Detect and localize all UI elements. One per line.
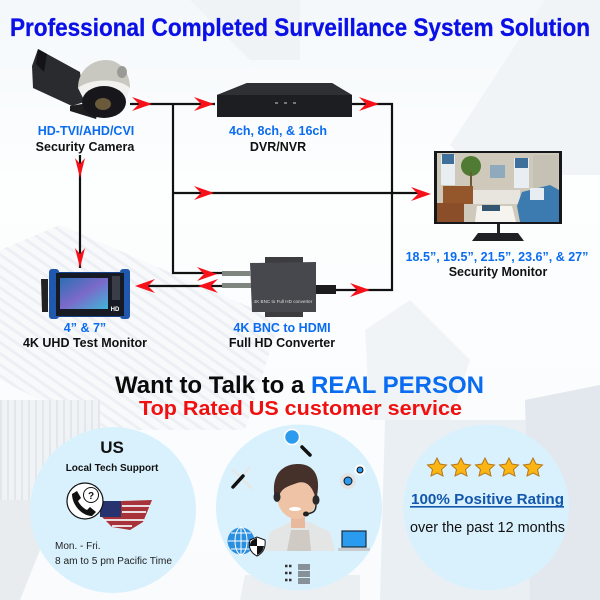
icon: DVR [217,83,352,117]
text: local tech support: Local Tech Support [66,463,159,474]
label: camera: HD-TVI/AHD/CVI [38,124,134,138]
icon: gears [340,464,366,489]
label: security monitor: Security Monitor [449,265,547,279]
icon: phone with question mark [67,483,103,519]
icon: BNC to HDMI converter [222,257,336,317]
label: test monitor: 4K UHD Test Monitor [23,336,147,350]
label: DVR: DVR/NVR [250,140,306,154]
heading: US: US [100,438,124,457]
text: hours: Mon. - Fri. [55,541,101,552]
icon: security cameras [32,49,130,119]
icon: phone with question mark: ? [88,491,94,502]
icon: tools [232,467,252,489]
label: camera: Security Camera [36,140,135,154]
icon: security monitor [434,151,562,241]
text: 100% positive rating: 100% Positive Rating [411,491,564,508]
underline [410,506,564,508]
icon: US flag map [100,500,152,530]
label: camera [36,124,135,154]
label: test monitor [23,321,147,350]
text: hours [55,541,172,567]
text: hours: 8 am to 5 pm Pacific Time [55,556,172,567]
text: over the past 12 months: over the past 12 months [410,520,565,536]
icon: laptop [338,531,370,551]
agent portrait [265,464,335,551]
label: converter: Full HD Converter [229,336,335,350]
icon: server list [285,565,310,583]
label: converter: 4K BNC to HDMI [233,321,331,335]
label: DVR [229,124,327,154]
icon: magnifier [284,430,310,455]
icon: globe with shield [228,527,265,556]
arrows [75,97,431,297]
connection lines [80,104,420,290]
panel: support agent [216,424,382,590]
icon: BNC to HDMI converter: 4K BNC to Full HD converter [254,299,313,304]
panel: rating [403,424,569,590]
icon: five stars [428,458,542,476]
panel: US support [30,427,196,593]
label: security monitor [406,250,588,279]
label: security monitor: 18.5”, 19.5”, 21.5”, 23.6”, & 27” [406,250,588,264]
label: converter [229,321,335,350]
icon: test monitor: HD [111,307,120,313]
heading: talk to a real person: Want to Talk to a REAL PERSON [115,372,484,399]
label: DVR: 4ch, 8ch, & 16ch [229,124,327,138]
subheading: Top Rated US customer service [139,397,462,420]
icon: test monitor [41,269,130,319]
label: test monitor: 4” & 7” [64,321,106,335]
